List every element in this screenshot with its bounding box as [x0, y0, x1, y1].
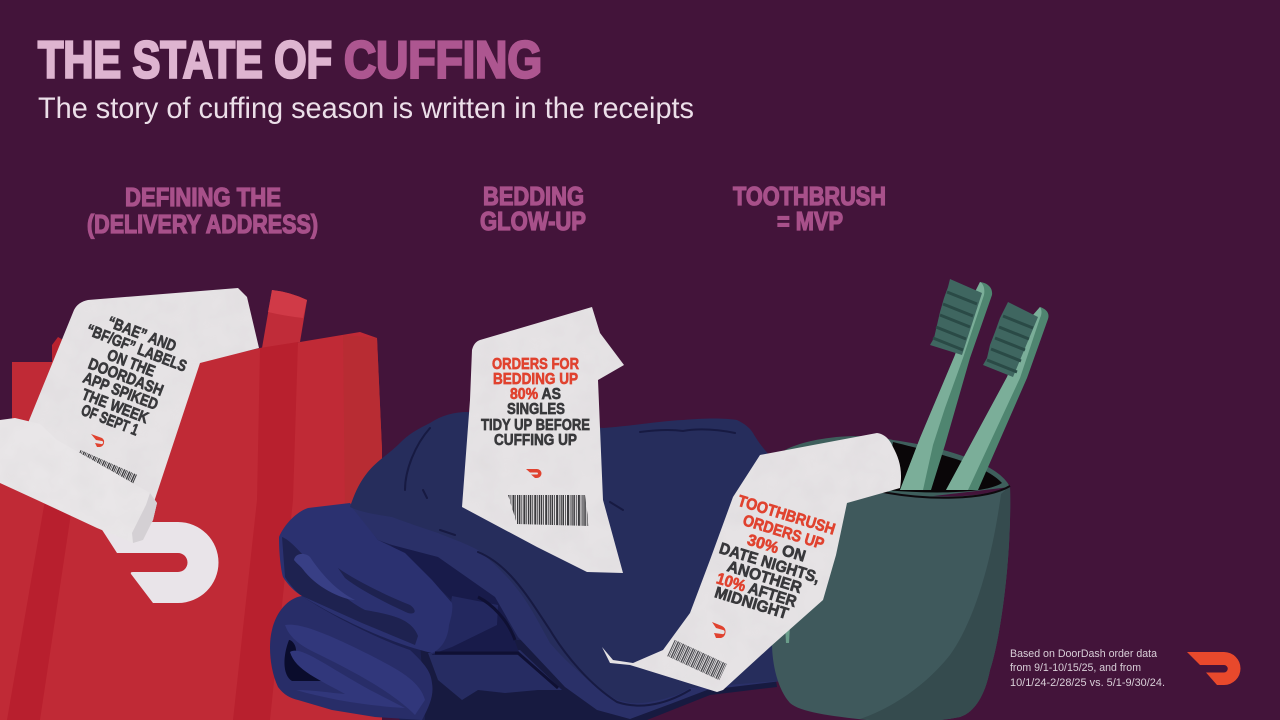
- receipt text: MIDNIGHT: [712, 584, 790, 623]
- heading: bedding glow-up: BEDDING: [483, 181, 584, 211]
- subtitle: The story of cuffing season is written in the receipts: [38, 92, 694, 125]
- fold shadow: [385, 540, 520, 655]
- cup interior: [885, 442, 1002, 492]
- receipt: toothbrush: [602, 433, 901, 692]
- receipt text: DOORDASH: [86, 356, 166, 400]
- bag back tip: [52, 337, 72, 365]
- footnote: [1010, 648, 1165, 689]
- paper: [462, 307, 624, 573]
- receipt: delivery address: [0, 288, 259, 543]
- heading: bedding glow-up: [480, 181, 586, 236]
- title: THE STATE OF: [38, 32, 332, 90]
- cup rim back: [785, 436, 1010, 500]
- receipt text: CUFFING UP: [494, 432, 577, 449]
- upper fold: [279, 503, 452, 653]
- top blanket outer band: [350, 415, 790, 719]
- bristles: [983, 302, 1038, 377]
- receipt text: [712, 493, 837, 623]
- handle tip behind cup: [785, 625, 790, 643]
- receipt text: 80% AS: [510, 386, 561, 403]
- illustration: navy folded blanket: [270, 412, 790, 720]
- receipt text: THE WEEK: [79, 386, 151, 427]
- heading: bedding glow-up: GLOW-UP: [480, 206, 586, 236]
- middle band: [428, 650, 562, 700]
- receipt text: APP SPIKED: [80, 370, 160, 414]
- receipt text: ORDERS UP: [741, 512, 826, 553]
- illustration: red delivery bag: [0, 290, 382, 720]
- heading: toothbrush mvp: TOOTHBRUSH: [733, 181, 886, 211]
- cup lip: [883, 486, 1010, 498]
- lower fold: [270, 596, 433, 720]
- title: CUFFING: [344, 32, 542, 90]
- receipt text: 30% ON: [745, 532, 807, 566]
- receipt text: [481, 356, 590, 449]
- crease lines: [405, 428, 735, 706]
- barcode: [78, 456, 135, 481]
- receipt logo: [91, 434, 104, 447]
- toothbrush right: [946, 302, 1049, 490]
- heading: toothbrush mvp: [733, 181, 886, 236]
- blanket base shadow: [420, 640, 777, 720]
- paper: [602, 433, 901, 692]
- receipt text: OF SEPT 1: [79, 402, 141, 440]
- heading: defining the delivery address: DEFINING THE: [125, 182, 281, 212]
- fold inner panel: [430, 596, 498, 655]
- bag fold panels: [233, 342, 298, 720]
- receipt text: [79, 314, 189, 440]
- curled paper roll: [0, 418, 157, 543]
- dark fold lines: [435, 597, 558, 688]
- receipt text: DATE NIGHTS,: [717, 540, 822, 587]
- bag logo: [97, 522, 219, 603]
- receipt logo: [526, 469, 542, 478]
- paper body: [28, 288, 259, 505]
- bristles: [930, 279, 982, 355]
- receipt text: 10% AFTER: [714, 570, 799, 611]
- cup body: [772, 470, 1010, 720]
- receipt text: “BF/GF” LABELS: [84, 322, 189, 376]
- footnote: 10/1/24-2/28/25 vs. 5/1-9/30/24.: [1010, 677, 1165, 689]
- heading: defining the delivery address: [87, 182, 318, 239]
- barcode: [508, 494, 590, 526]
- receipt text: ON THE: [105, 347, 158, 381]
- receipt text: ORDERS FOR: [492, 356, 579, 373]
- footnote: from 9/1-10/15/25, and from: [1010, 662, 1141, 674]
- footnote: Based on DoorDash order data: [1010, 648, 1158, 660]
- receipt text: ANOTHER: [725, 558, 804, 597]
- receipt text: “BAE” AND: [105, 314, 178, 356]
- roll end: [132, 493, 157, 543]
- receipt text: TIDY UP BEFORE: [481, 417, 590, 434]
- doordash logo: [1187, 652, 1241, 685]
- receipt text: BEDDING UP: [493, 371, 578, 388]
- blanket underlay: [300, 505, 560, 720]
- bag body: [0, 332, 382, 720]
- receipt logo: [712, 622, 726, 638]
- receipt: bedding: [462, 307, 624, 573]
- top blanket main: [350, 412, 790, 703]
- bag handle: [262, 290, 307, 348]
- receipt text: SINGLES: [507, 401, 565, 418]
- cup shadow: [860, 486, 1010, 720]
- receipt text: TOOTHBRUSH: [736, 493, 837, 539]
- toothbrush left: [900, 279, 992, 490]
- barcode: [671, 648, 723, 672]
- illustration: toothbrush cup: [772, 279, 1049, 720]
- heading: toothbrush mvp: = MVP: [777, 206, 843, 236]
- heading: defining the delivery address: (DELIVERY ADDRESS): [87, 209, 318, 239]
